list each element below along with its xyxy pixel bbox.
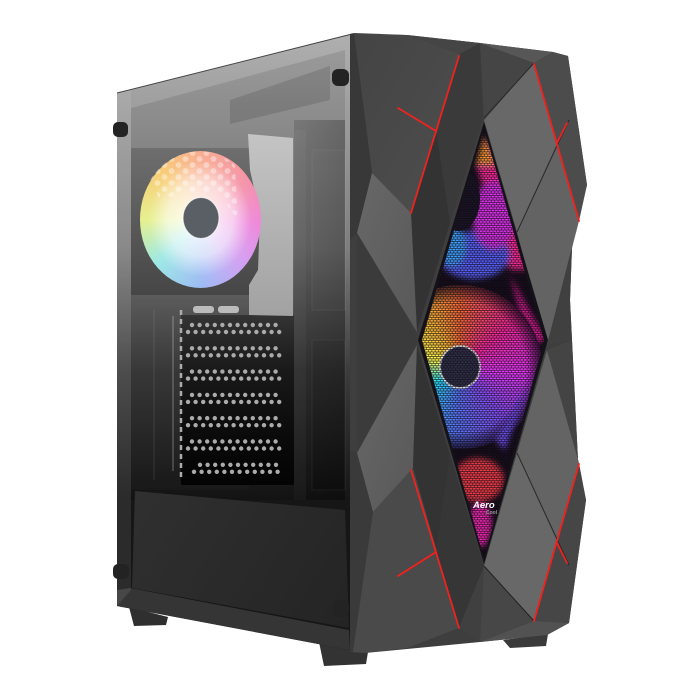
- logo: [472, 500, 498, 516]
- mesh intake window: [418, 122, 548, 564]
- glass screws: [113, 69, 349, 617]
- front body silhouette: [350, 34, 587, 653]
- case interior: [117, 30, 352, 655]
- upper left facets: [350, 33, 483, 332]
- front panel: [350, 33, 587, 653]
- expansion slot rows: [181, 310, 283, 478]
- middle left facets: [357, 233, 450, 552]
- logo: Aero: [472, 500, 495, 511]
- lower right facets: [480, 340, 586, 642]
- glass edge strips: [117, 34, 352, 606]
- bottom fan glow: [452, 385, 528, 547]
- illustration: PC tower case: [113, 33, 587, 666]
- cable cutouts: [193, 306, 239, 313]
- feet: [129, 607, 548, 666]
- fan hub: [183, 198, 219, 238]
- lower left facets: [350, 450, 484, 653]
- side glass panel: [113, 30, 352, 655]
- glass tint: [117, 34, 352, 650]
- center fan: [422, 285, 541, 449]
- center fan hub: [440, 346, 480, 388]
- PSU shroud: [132, 491, 349, 628]
- power supply panel: [248, 134, 293, 316]
- top fan glow: [438, 136, 548, 345]
- upper right facets: [480, 43, 587, 345]
- RGB rear fan: [140, 151, 261, 288]
- bottom bar: [117, 588, 350, 650]
- fan frame: [131, 148, 262, 295]
- top fan hub: [454, 176, 480, 231]
- RGB fans behind mesh: [422, 134, 544, 552]
- interior shading behind glass: [131, 50, 345, 500]
- logo: Cool: [486, 510, 498, 516]
- red accent lines: [398, 56, 579, 628]
